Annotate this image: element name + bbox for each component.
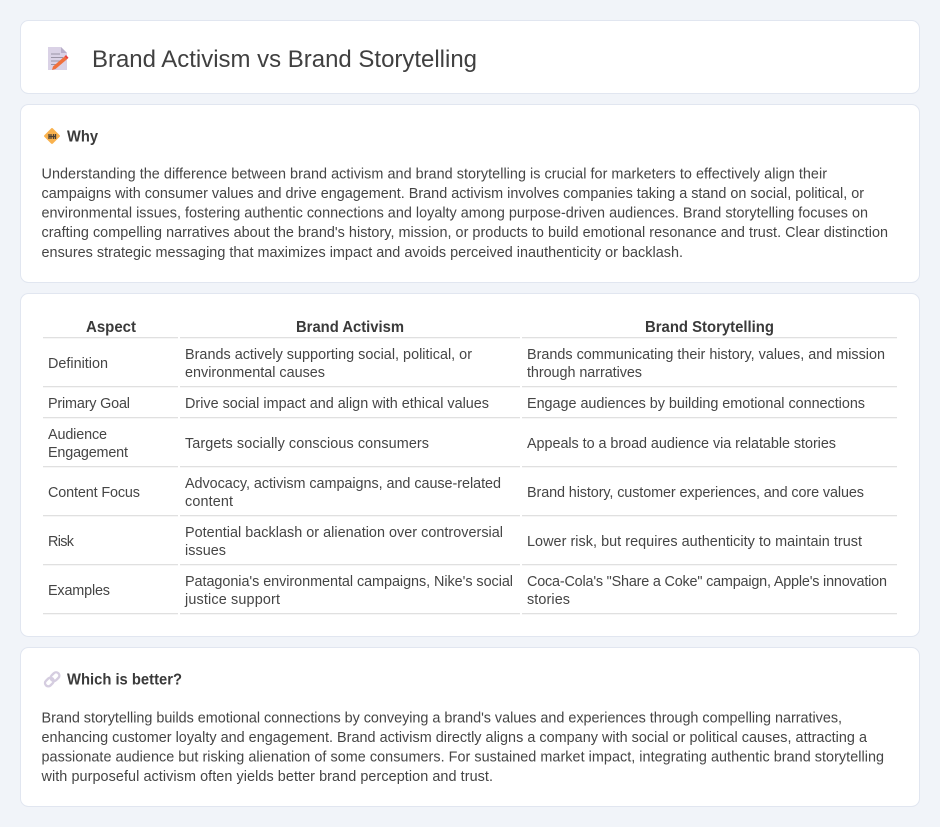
row: primary goal	[48, 396, 865, 412]
row: audience engagement: Audience	[48, 427, 107, 443]
text block: why paragraph	[42, 166, 888, 261]
row: audience engagement: Appeals to a broad audience via relatable stories	[527, 436, 836, 452]
table header row: Aspect	[86, 319, 137, 336]
row: risk: Potential backlash or alienation over controversial	[185, 525, 503, 541]
row: definition	[48, 347, 885, 381]
table header row: Brand Activism	[296, 319, 404, 336]
row: definition: Definition	[48, 356, 108, 372]
panel: which is better	[20, 648, 920, 806]
row: definition: Brands actively supporting social, political, or	[185, 347, 472, 363]
table header row	[86, 319, 774, 336]
row: definition: environmental causes	[185, 365, 325, 381]
row: examples: Patagonia's environmental campaigns, Nike's social	[185, 574, 513, 590]
row: content focus: Advocacy, activism campaigns, and cause-related	[185, 476, 501, 492]
text block: which is better paragraph: with purposeful activism often yields better brand perception and trust.	[40, 769, 493, 785]
row: examples	[48, 574, 887, 608]
row: examples: Coca-Cola's "Share a Coke" campaign, Apple's innovation	[527, 574, 887, 590]
row: risk: issues	[185, 543, 226, 559]
row: audience engagement	[48, 427, 836, 461]
row: risk: Lower risk, but requires authenticity to maintain trust	[527, 534, 862, 550]
text block: why paragraph: ensures strategic messaging that maximizes impact and avoids perceived inauthenticity or backlash.	[42, 245, 683, 261]
heading: which is better: Which is better?	[67, 672, 182, 688]
text block: which is better paragraph	[40, 710, 884, 785]
text block: why paragraph: Understanding the difference between brand activism and brand storytelling is crucial for marketers to effectively align their	[42, 166, 827, 182]
row: audience engagement: Targets socially conscious consumers	[185, 436, 429, 452]
text block: why paragraph: crafting compelling narratives about the brand's history, mission, or products to build emotional resonance and trust. Clear distinction	[42, 225, 888, 241]
text block: why paragraph: environmental issues, fostering authentic connections and loyalty among purpose-driven audiences. Brand storytelling focuses on	[42, 206, 868, 222]
row: examples: justice support	[184, 592, 280, 608]
row: examples: stories	[527, 592, 570, 608]
icon: chain link	[44, 671, 61, 688]
text block: why paragraph: campaigns with consumer values and drive engagement. Brand activism involves companies taking a stand on social, political, or	[42, 186, 864, 202]
row: content focus	[48, 476, 864, 510]
icon: document with pencil	[48, 47, 68, 70]
panel: comparison table	[20, 294, 920, 636]
table header row: Brand Storytelling	[645, 319, 774, 336]
icon: orange diamond sign	[44, 128, 60, 144]
panel: header	[20, 20, 920, 94]
text block: which is better paragraph: enhancing customer loyalty and engagement. Brand activism directly aligns a company with social or political causes, attracting a	[42, 730, 867, 746]
panel: why	[20, 104, 920, 282]
text block: which is better paragraph: passionate audience but risking alienation of some consumers. For sustained market impact, integrating authentic brand storytelling	[42, 750, 884, 766]
row: primary goal: Primary Goal	[48, 396, 130, 412]
row: examples: Examples	[48, 583, 110, 599]
row: content focus: Content Focus	[48, 485, 140, 501]
title: Brand Activism vs Brand Storytelling	[92, 46, 477, 73]
text block: which is better paragraph: Brand storytelling builds emotional connections by conveying a brand's values and experiences through compelling narratives,	[42, 710, 842, 726]
row: audience engagement: Engagement	[48, 445, 128, 461]
row: content focus: Brand history, customer experiences, and core values	[527, 485, 864, 501]
row: risk: Risk	[48, 534, 75, 550]
row: definition: Brands communicating their history, values, and mission	[527, 347, 885, 363]
heading: why: Why	[67, 128, 98, 146]
row: primary goal: Engage audiences by building emotional connections	[527, 396, 865, 412]
row: content focus: content	[185, 494, 233, 510]
row: primary goal: Drive social impact and align with ethical values	[185, 396, 489, 412]
row: definition: through narratives	[527, 365, 642, 381]
row: risk	[48, 525, 862, 559]
